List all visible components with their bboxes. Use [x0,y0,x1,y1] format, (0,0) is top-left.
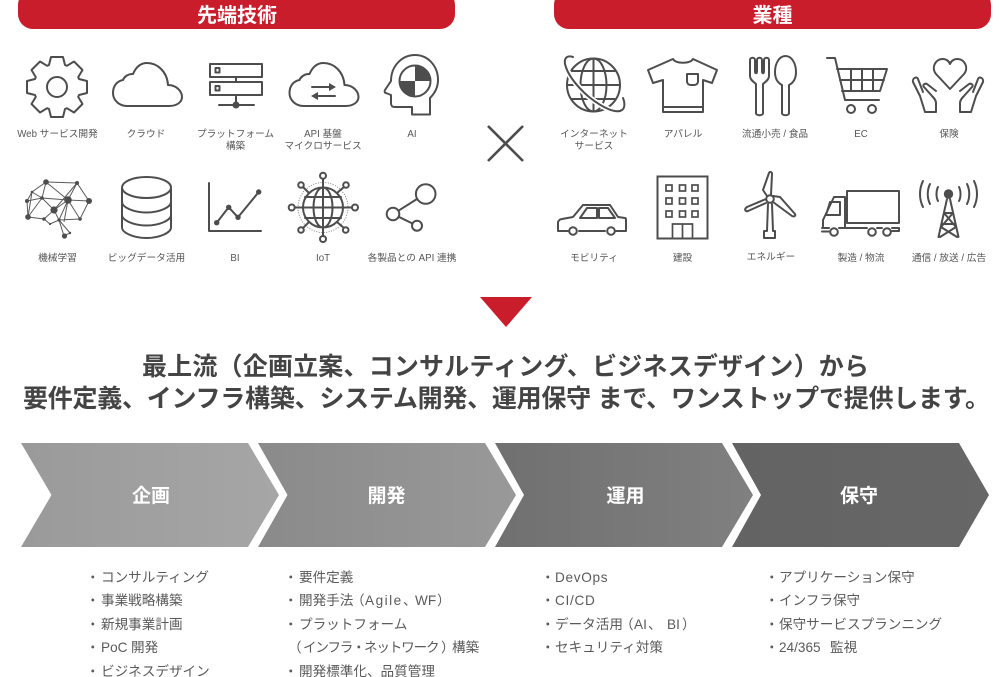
headline message: 最上流（企画立案、コンサルティング、ビジネスデザイン）から [142,352,869,381]
list: 企画 items: ・ [86,570,100,585]
chevron: 企画: 企画 [132,485,170,507]
icon: truck, manufacturing and logistics [822,191,899,264]
list: 開発 items: ・ [284,570,298,585]
icon: building, construction [658,176,708,264]
list: 開発 items: ・ [352,640,366,655]
icon: shopping cart, EC: EC [854,129,868,140]
list: 保守 items: ・ [765,570,779,585]
icon: hands with heart, insurance: 保険 [939,127,959,140]
list: 企画 items: ・ [86,617,100,632]
list: 保守 items: 監視 [830,640,858,655]
list: 開発 items: ） [437,593,451,608]
chevron: 保守: 保守 [840,485,878,507]
icon: radio tower, telecom: 通信 / 放送 / 広告 [912,251,986,264]
list: 開発 items: ） [441,640,455,655]
list: 開発 items: ネットワーク [364,640,438,655]
list: 保守 items: 保守サービスプランニング [779,617,943,632]
icon: brain network, machine learning: 機械学習 [38,251,77,264]
icon: hands with heart, insurance [913,59,983,140]
list: 開発 items: プラットフォーム [299,617,407,632]
list: 運用 items: ・ [541,640,555,655]
list: 保守 items: 24/365 [779,640,824,655]
list: 運用 items: ・ [541,593,555,608]
icon: truck, manufacturing and logistics: 製造 / 物流 [838,251,885,264]
icon: red down triangle [480,297,532,327]
icon: wind turbine, energy [745,172,795,263]
icon: AI head [385,55,438,140]
list: 運用 items: AI [634,617,647,632]
icon: line chart, BI [209,183,261,264]
icon: globe with nodes, IoT: IoT [316,253,330,264]
icon: cloud with arrows, API [284,63,362,152]
list: 運用 items [541,570,696,655]
list: 保守 items: ・ [765,640,779,655]
icon: radio tower, telecom [912,181,986,264]
chevron: 開発: 開発 [367,485,406,507]
icon: car, mobility: モビリティ [570,252,618,264]
icon: globe with nodes, IoT [289,173,358,264]
list: 企画 items: コンサルティング [101,570,209,585]
list: 開発 items: WF [415,593,436,608]
icon: server platform [197,64,274,152]
icon: server platform: 構築 [226,139,245,152]
list: 開発 items: ・ [284,617,298,632]
list: 企画 items [86,570,210,677]
icon: gear, Web services: Web サービス開発 [17,127,98,140]
list: 運用 items: （ [620,617,634,632]
list: 運用 items: BI [667,617,680,632]
list: 運用 items: セキュリティ対策 [555,639,663,655]
icon: building, construction: 建設 [673,252,692,264]
icon: cloud with arrows, API: API 基盤 [304,127,342,140]
heading pill: 業種: 業種 [752,4,792,27]
list: 保守 items: アプリケーション保守 [779,570,915,585]
icon: wind turbine, energy: エネルギー [747,251,795,263]
icon: line chart, BI: BI [230,253,240,264]
icon: globe with orbit, internet: インターネット [560,128,628,140]
list: 企画 items: 新規事業計画 [101,617,183,632]
list: 企画 items: 開発 [131,640,159,655]
list: 企画 items: PoC [101,640,131,655]
list: 運用 items: DevOps [555,570,608,585]
list: 運用 items: ） [682,617,696,632]
icon: globe with orbit, internet: サービス [575,140,613,152]
icon: fork and spoon, retail: 流通小売 / 食品 [742,127,808,140]
headline message [23,352,990,413]
list: 開発 items [284,569,480,677]
icon: cloud [113,63,182,140]
list: 保守 items: インフラ保守 [779,593,860,608]
list: 開発 items: インフラ [303,640,352,655]
list: 保守 items: ・ [765,593,779,608]
list: 運用 items: ・ [541,570,555,585]
icon: t-shirt, apparel [648,59,717,140]
chevron: 開発 [258,443,516,547]
icon: database, big data [108,177,185,264]
icon: AI head: AI [407,129,417,140]
icon: share nodes, API integration [368,184,457,264]
icon: car, mobility [558,205,626,264]
icon: server platform: プラットフォーム [197,128,274,140]
heading pill: 先端技術: 先端技術 [197,3,277,27]
list: 開発 items: （ [288,640,302,655]
list: 保守 items: ・ [765,617,779,632]
list: 開発 items: 開発手法 [299,593,354,608]
list: 運用 items: CI/CD [555,593,596,608]
list: 企画 items: 事業戦略構築 [101,593,183,608]
icon: cloud with arrows, API: マイクロサービス [284,140,362,152]
chevron: 運用 [495,443,753,547]
chevron: 企画 [21,443,279,547]
icon: shopping cart, EC [827,58,887,140]
chevron: 保守 [732,443,989,547]
list: 保守 items [765,570,943,655]
list: 開発 items: （ [351,593,365,608]
icon: gear, Web services [17,57,98,140]
list: 開発 items: Agile [365,593,403,608]
headline message: 要件定義、インフラ構築、システム開発、運用保守 まで、ワンストップで提供します。 [23,385,990,413]
icon: multiply cross [488,126,523,161]
icon: fork and spoon, retail [742,56,808,140]
list: 企画 items: ・ [86,640,100,655]
icon: brain network, machine learning [25,179,92,264]
list: 開発 items: 要件定義 [299,569,354,585]
list: 開発 items: ・ [284,593,298,608]
list: 企画 items: ・ [86,593,100,608]
chevron: 運用: 運用 [606,485,645,507]
icon: share nodes, API integration: 各製品との API 連携 [368,251,457,264]
list: 運用 items: 、 [648,617,662,632]
list: 開発 items: 構築 [452,640,480,655]
icon: globe with orbit, internet [560,56,628,152]
list: 開発 items: 、 [403,593,417,608]
icon: cloud: クラウド [127,128,165,140]
list: 運用 items: データ活用 [555,616,623,632]
list: 運用 items: ・ [541,617,555,632]
icon: database, big data: ビッグデータ活用 [108,251,185,264]
icon: t-shirt, apparel: アパレル [664,128,703,140]
heading pill: 業種 [554,0,991,29]
heading pill: 先端技術 [18,0,455,29]
